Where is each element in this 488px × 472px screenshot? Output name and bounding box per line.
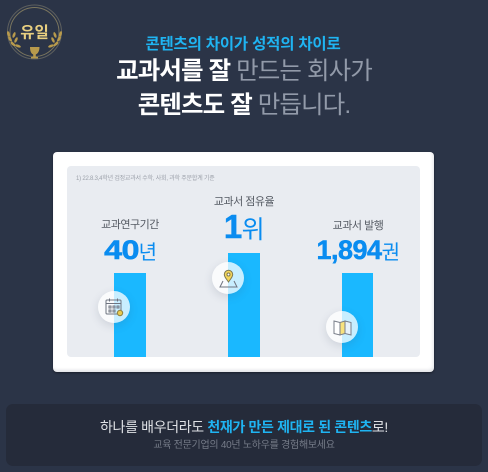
main heading: 콘텐츠도 잘 만듭니다.: [138, 92, 350, 119]
value: 1위: 1: [224, 208, 242, 245]
badge: 유일 laurel and trophy: 유일: [20, 24, 49, 42]
value: 1,894권: 권: [382, 242, 399, 264]
bar: 교과연구기간: [114, 273, 146, 357]
label: 교과서 발행: 교과서 발행: [333, 220, 383, 232]
value: 40년: 년: [139, 242, 156, 264]
value: 1,894권: 1,894: [316, 235, 382, 265]
icon: folded map: [326, 311, 358, 343]
chart panel: [67, 166, 420, 357]
bar: 교과서 발행: [342, 273, 373, 357]
panel: statistics card: [53, 152, 434, 372]
callout headline: 하나를 배우더라도 천재가 만든 제대로 된 콘텐츠로!: [100, 419, 388, 435]
value: 1위: [224, 208, 264, 245]
value: 1위: 위: [242, 216, 264, 244]
subtitle: 콘텐츠의 차이가 성적의 차이로: [145, 36, 341, 53]
label: 교과서 점유율: 교과서 점유율: [214, 196, 274, 208]
badge: 유일 laurel and trophy: [7, 4, 62, 60]
footnote: 1) 22.8.3,4학년 검정교과서 수학, 사회, 과학 주문합계 기준: [76, 176, 215, 182]
label: 교과연구기간: 교과연구기간: [101, 219, 159, 231]
icon: map pin: [212, 262, 244, 294]
bar: 교과서 점유율: [228, 253, 260, 357]
value: 40년: [104, 235, 156, 265]
main heading: [116, 58, 372, 119]
callout subtext: 교육 전문기업의 40년 노하우를 경험해보세요: [153, 440, 335, 451]
panel: bottom callout: [6, 404, 482, 466]
value: 40년: 40: [104, 235, 138, 265]
main heading: 교과서를 잘 만드는 회사가: [116, 58, 372, 85]
icon: calendar: [98, 291, 130, 323]
